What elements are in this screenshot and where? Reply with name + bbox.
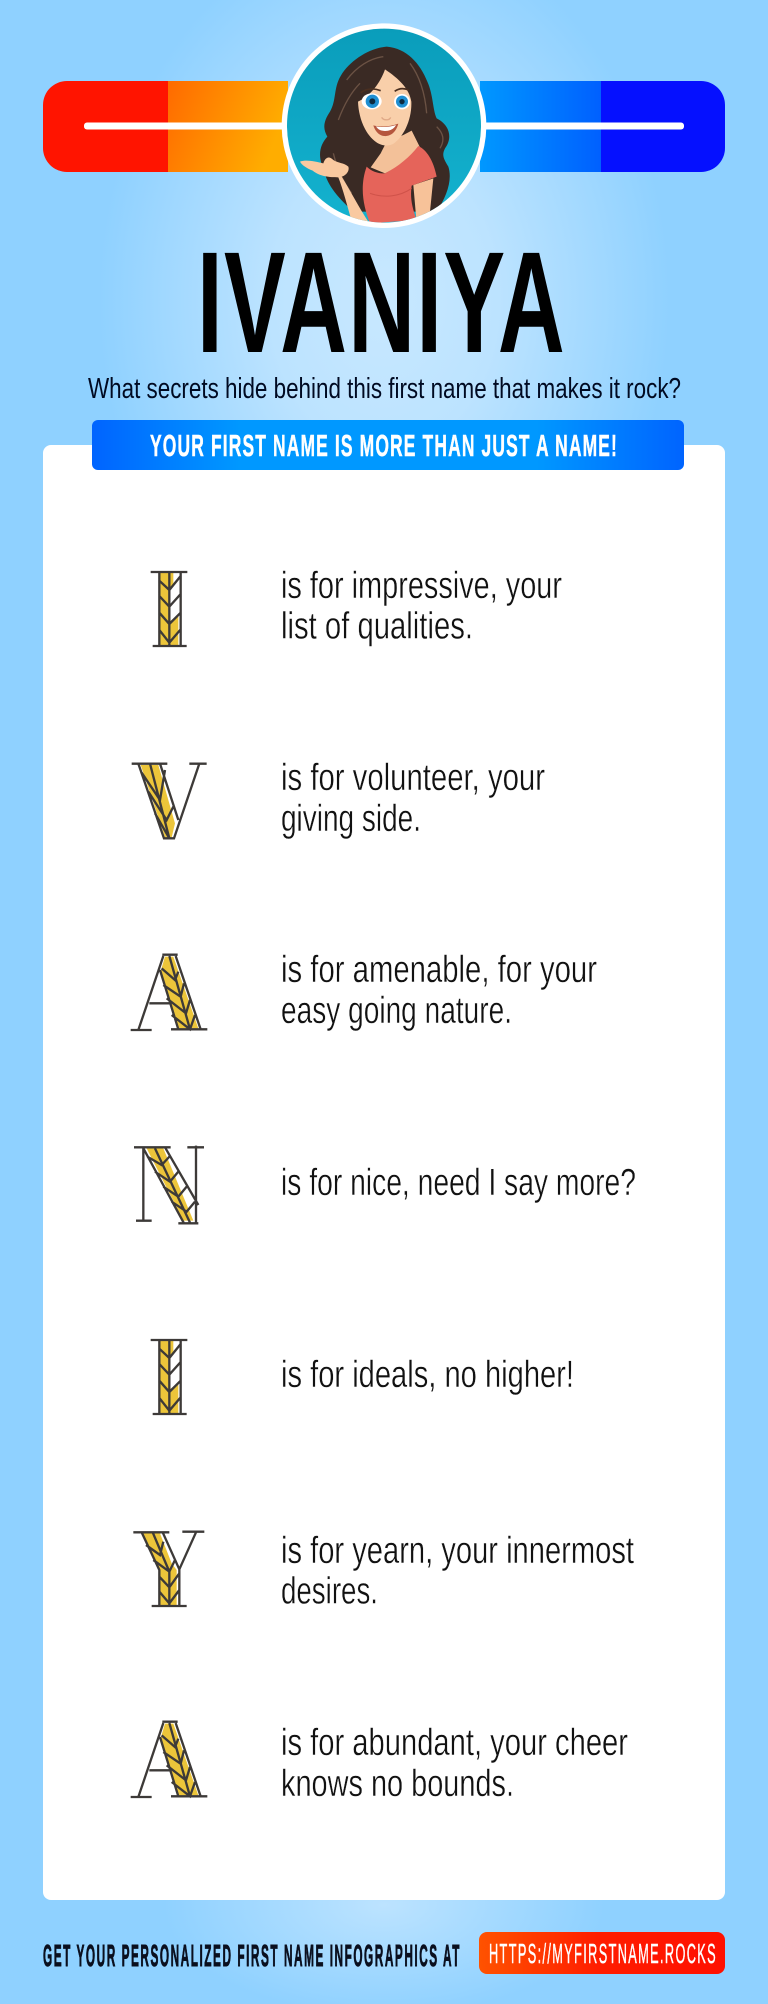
row: I impressive (151, 565, 562, 648)
text: yearn (281, 1530, 634, 1612)
text: abundant (281, 1722, 628, 1805)
text: nice: is for nice, need I say more? (281, 1162, 636, 1204)
text: volunteer (281, 757, 545, 840)
icon: letter A (131, 1722, 207, 1797)
banner (92, 420, 684, 470)
bar white line (84, 122, 684, 130)
text: abundant: is for abundant, your cheer (281, 1722, 628, 1764)
text: abundant: knows no bounds. (281, 1763, 514, 1805)
title: IVANIYA (197, 222, 566, 383)
text: ideals: is for ideals, no higher! (281, 1354, 574, 1396)
text: impressive: list of qualities. (281, 606, 473, 648)
header colour bar (43, 81, 725, 172)
text: yearn: is for yearn, your innermost (281, 1530, 634, 1572)
row: I ideals (151, 1340, 574, 1414)
row: Y yearn (133, 1530, 634, 1612)
avatar portrait (282, 23, 486, 228)
icon: letter I (151, 572, 187, 646)
text: amenable: is for amenable, for your (281, 949, 597, 991)
text: yearn: desires. (281, 1570, 378, 1612)
row: A abundant (131, 1722, 628, 1805)
row: A amenable (131, 949, 597, 1032)
text: impressive: is for impressive, your (281, 565, 562, 607)
row: N nice (134, 1146, 636, 1224)
icon: letter N (134, 1146, 204, 1224)
white content panel (43, 445, 725, 1900)
icon: letter V (132, 764, 207, 838)
text: volunteer: is for volunteer, your (281, 757, 545, 799)
text: amenable: easy going nature. (281, 990, 512, 1032)
row: V volunteer (132, 757, 545, 840)
text: amenable (281, 949, 597, 1032)
text: volunteer: giving side. (281, 798, 421, 840)
icon: letter Y (133, 1532, 204, 1606)
footer url button (479, 1932, 725, 1974)
text: impressive (281, 565, 562, 648)
icon: letter A (131, 955, 207, 1030)
icon: letter I (151, 1340, 187, 1414)
